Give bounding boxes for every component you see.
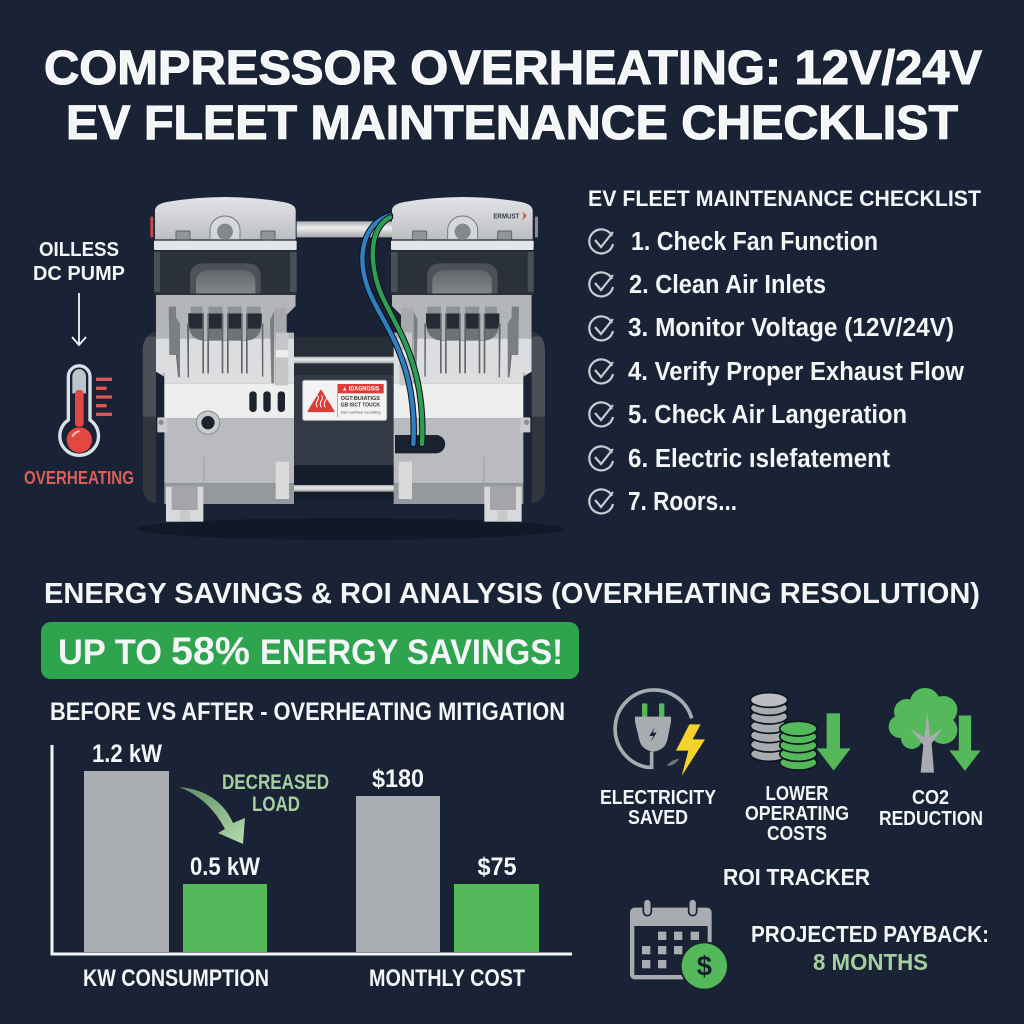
warning label — [303, 380, 387, 420]
label: lower operating costs: OPERATING — [745, 803, 849, 825]
label: electricity saved: ELECTRICITY — [600, 787, 717, 809]
callout: oilless DC pump: DC PUMP — [33, 262, 125, 285]
cooling slots — [249, 391, 285, 412]
warning label: GB ISCT TOUCK — [341, 403, 381, 409]
warning label: ▲ IDAGNOSIS — [342, 387, 379, 393]
item 2: 2. Clean Air Inlets — [629, 271, 826, 299]
callout: oilless DC pump — [33, 238, 125, 285]
brand mark: ERMUST — [493, 212, 520, 221]
label: CO2 reduction — [879, 787, 983, 830]
value: 1.2 kW: 1.2 kW — [92, 740, 162, 768]
icon: electricity saved — [615, 690, 705, 776]
title: COMPRESSOR OVERHEATING: 12V/24V — [44, 42, 982, 95]
axis label: monthly cost: MONTHLY COST — [369, 965, 525, 992]
red tag — [150, 217, 153, 237]
item 3: 3. Monitor Voltage (12V/24V) — [628, 314, 954, 342]
item 7: 7. Roors... — [628, 488, 737, 516]
value: 0.5 kW: 0.5 kW — [190, 853, 260, 881]
bar: kW before — [84, 771, 169, 952]
label: electricity saved: SAVED — [628, 807, 688, 829]
title: EV FLEET MAINTENANCE CHECKLIST — [66, 97, 958, 150]
bar: cost before — [356, 796, 440, 952]
savings banner — [41, 622, 579, 679]
savings banner: ENERGY SAVINGS! — [260, 633, 563, 672]
checklist — [589, 228, 964, 516]
savings banner: UP TO — [58, 633, 162, 672]
axis label: kW consumption: KW CONSUMPTION — [83, 965, 269, 992]
item 4: 4. Verify Proper Exhaust Flow — [628, 358, 964, 386]
value: $180: $180 — [372, 765, 424, 793]
callout: decreased load: DECREASED — [222, 771, 329, 794]
icon: thermometer — [60, 366, 112, 455]
section heading: ENERGY SAVINGS & ROI ANALYSIS (OVERHEATING RESOLUTION) — [44, 578, 980, 610]
checklist heading: EV FLEET MAINTENANCE CHECKLIST — [588, 186, 981, 211]
callout: decreased load: LOAD — [252, 793, 300, 816]
label: overheating: OVERHEATING — [24, 468, 134, 488]
warning label: burn surface necoding — [341, 409, 381, 414]
arrow: pump to thermometer — [72, 293, 86, 345]
callout: oilless DC pump: OILLESS — [39, 238, 119, 261]
wires — [362, 215, 422, 444]
icon: lower operating costs — [750, 693, 851, 771]
label: CO2 reduction: REDUCTION — [879, 808, 983, 830]
callout: projected payback: 8 MONTHS — [813, 949, 928, 975]
icon: CO2 reduction — [889, 688, 982, 773]
item 7 — [589, 488, 737, 516]
label: CO2 reduction: CO2 — [912, 787, 949, 809]
illustration: compressor pump — [137, 197, 563, 540]
item 6: 6. Electric ıslefatement — [628, 445, 890, 473]
icon: calendar with dollar: $ — [697, 951, 712, 982]
label: lower operating costs: LOWER — [766, 783, 829, 805]
chart heading: BEFORE VS AFTER - OVERHEATING MITIGATION — [50, 698, 565, 726]
callout: decreased load — [222, 771, 329, 816]
warning label: OGT:BUIATIGS — [341, 396, 380, 402]
central motor housing — [293, 337, 397, 500]
value: $75: $75 — [478, 853, 517, 881]
label: lower operating costs: COSTS — [767, 823, 827, 845]
bar: kW after — [183, 884, 267, 952]
savings banner: 58% — [171, 630, 250, 673]
cable slot — [395, 435, 445, 453]
bar chart — [52, 740, 572, 992]
label: lower operating costs — [745, 783, 849, 845]
bar: cost after — [454, 884, 539, 952]
pump shadow — [137, 518, 563, 540]
label: electricity saved — [600, 787, 717, 829]
item 5: 5. Check Air Langeration — [628, 401, 907, 429]
arrow: decreased load — [179, 787, 245, 844]
connecting rods — [289, 221, 401, 492]
heading: ROI tracker: ROI TRACKER — [723, 864, 870, 890]
icon: calendar with dollar — [630, 899, 729, 991]
left cylinder — [140, 197, 307, 522]
callout: projected payback — [751, 921, 989, 975]
item 1: 1. Check Fan Function — [631, 228, 878, 256]
right cylinder — [381, 197, 548, 522]
callout: projected payback: PROJECTED PAYBACK: — [751, 921, 989, 947]
title — [44, 42, 982, 150]
port — [196, 411, 220, 434]
grey tag — [535, 217, 538, 237]
